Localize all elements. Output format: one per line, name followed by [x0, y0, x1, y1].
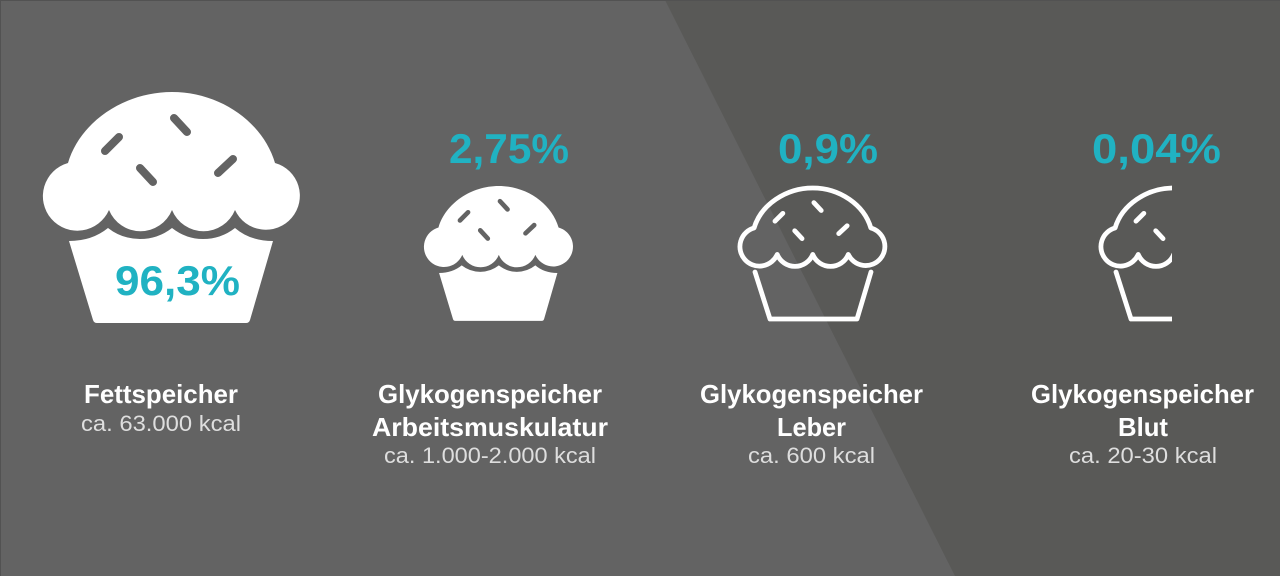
heading: Glykogenspeicher Leber: Glykogenspeicher: [700, 379, 923, 409]
heading: Glykogenspeicher Leber: [700, 379, 923, 442]
heading: Glykogenspeicher Leber: Leber: [777, 412, 846, 442]
text: ca. 600 kcal: ca. 600 kcal: [748, 443, 875, 468]
icon: outline muffin: [740, 188, 885, 319]
percentage: 0,9%: 0,9%: [778, 125, 878, 172]
percentage: 0,04%: 0,04%: [1092, 125, 1221, 172]
percentage: 96,3%: 96,3%: [115, 257, 240, 304]
icon: partial outline muffin: [1098, 186, 1172, 322]
panel: Fettspeicher: [43, 92, 300, 436]
text: ca. 20-30 kcal: ca. 20-30 kcal: [1069, 443, 1217, 468]
text: ca. 1.000-2.000 kcal: ca. 1.000-2.000 kcal: [384, 443, 596, 468]
heading: Glykogenspeicher Arbeitsmuskulatur: Glykogenspeicher: [378, 379, 602, 409]
heading: Glykogenspeicher Blut: Glykogenspeicher: [1031, 379, 1254, 409]
icon: solid large muffin: [43, 92, 300, 323]
heading: Fettspeicher: Fettspeicher: [84, 379, 238, 409]
panel: Glykogenspeicher Blut: [1031, 125, 1254, 468]
panel: Glykogenspeicher Arbeitsmuskulatur: [372, 125, 608, 468]
heading: Glykogenspeicher Arbeitsmuskulatur: Arbeitsmuskulatur: [372, 412, 608, 442]
heading: Glykogenspeicher Blut: [1031, 379, 1254, 442]
icon: solid medium muffin: [424, 186, 573, 321]
heading: Glykogenspeicher Arbeitsmuskulatur: [372, 379, 608, 442]
percentage: 2,75%: 2,75%: [449, 125, 569, 172]
text: ca. 63.000 kcal: ca. 63.000 kcal: [81, 411, 241, 436]
panel: Glykogenspeicher Leber: [700, 125, 923, 468]
heading: Glykogenspeicher Blut: Blut: [1118, 412, 1168, 442]
